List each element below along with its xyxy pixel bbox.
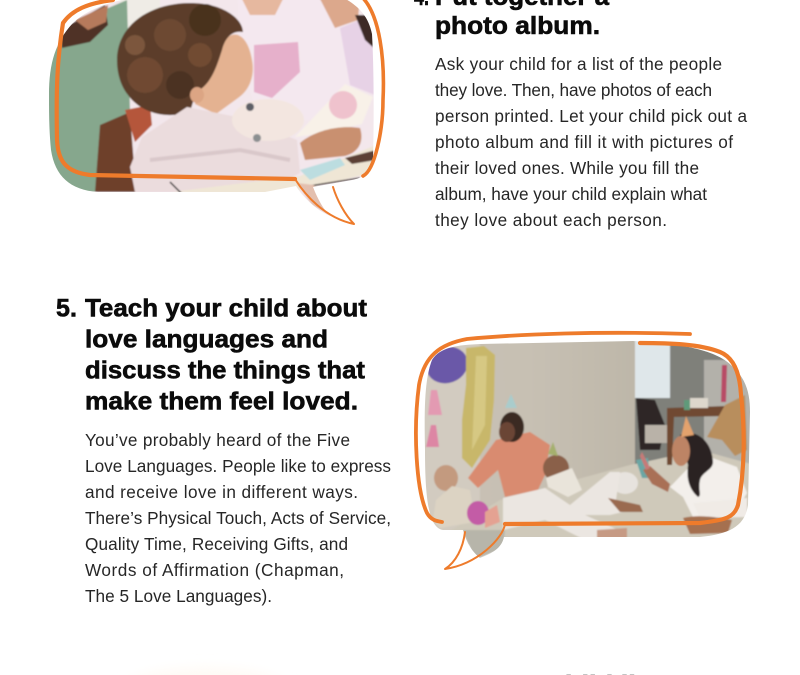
photo: family celebrating on the floor xyxy=(420,335,755,560)
heading: step 5: 5. xyxy=(56,294,77,322)
heading: step 4: photo album. xyxy=(435,12,600,40)
hand-drawn orange speech bubble outline xyxy=(416,333,744,569)
text block: step 4 description xyxy=(435,54,747,230)
text block: step 5 description: Quality Time, Receiving Gifts, and xyxy=(85,534,348,554)
text block: step 5 description: and receive love in different ways. xyxy=(85,482,358,502)
text block: step 4 description: they love about each person. xyxy=(435,210,667,230)
text block: step 4 description: Ask your child for a list of the people xyxy=(435,54,722,74)
text block: step 4 description: their loved ones. While you fill the xyxy=(435,158,699,178)
text block: step 5 description: You’ve probably heard of the Five xyxy=(85,430,350,450)
text block: step 4 description: album, have your child explain what xyxy=(435,184,707,204)
text block: step 5 description: There’s Physical Touch, Acts of Service, xyxy=(85,508,391,528)
text block: step 4 description: photo album and fill it with pictures of xyxy=(435,132,733,152)
heading: step 5: love languages and xyxy=(85,326,328,354)
photo callout: child with photo album xyxy=(40,0,383,225)
photo: next section image, cut off at page edge xyxy=(120,668,290,675)
heading: step 5: discuss the things that xyxy=(85,356,366,384)
hand-drawn orange speech bubble outline xyxy=(57,0,383,224)
text block: step 5 description: The 5 Love Languages). xyxy=(85,586,272,606)
photo: child looking at album xyxy=(40,0,380,225)
text block: step 4 description: they love. Then, have photos of each xyxy=(435,80,712,100)
heading: step 5: make them feel loved. xyxy=(85,388,358,416)
text block: step 4 description: person printed. Let your child pick out a xyxy=(435,106,747,126)
heading: step 5: Teach your child about xyxy=(85,294,368,322)
text block: step 5 description xyxy=(85,430,391,606)
photo callout: family birthday party xyxy=(416,333,755,569)
heading: step 4 xyxy=(414,0,610,40)
text block: step 5 description: Words of Affirmation (Chapman, xyxy=(85,560,344,580)
text block: step 5 description: Love Languages. People like to express xyxy=(85,456,391,476)
heading: step 5 xyxy=(56,294,368,416)
